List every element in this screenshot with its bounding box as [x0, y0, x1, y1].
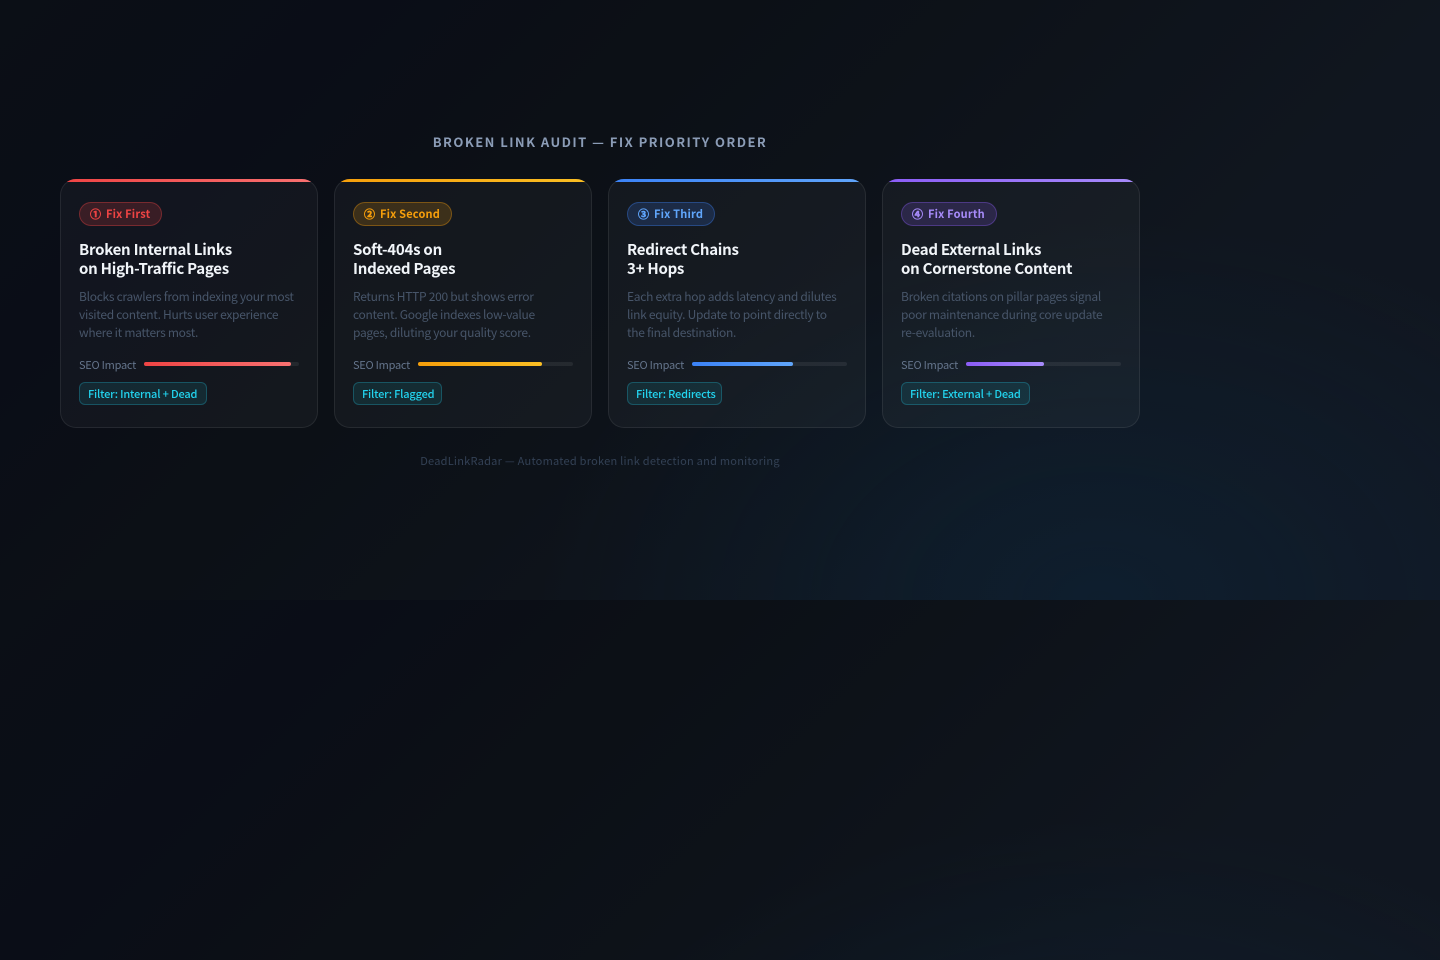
title: BROKEN LINK AUDIT — FIX PRIORITY ORDER [433, 132, 767, 151]
badge: fix second: ② [364, 206, 375, 222]
badge: fix third [627, 202, 715, 226]
card description: the final destination. [627, 324, 736, 341]
badge: fix first [79, 202, 162, 226]
footer note: DeadLinkRadar — Automated broken link detection and monitoring [420, 453, 780, 469]
badge: fix third: Fix Third [654, 206, 703, 222]
card description [353, 288, 535, 341]
badge: fix fourth: ④ [912, 206, 923, 222]
filter tag: Filter: Redirects [636, 386, 716, 402]
card heading: soft-404: Soft-404s on [353, 239, 442, 260]
card description: poor maintenance during core update [901, 306, 1102, 323]
card heading: broken internal links: Broken Internal Links [79, 239, 232, 260]
badge: fix second: Fix Second [380, 206, 440, 222]
card description: Each extra hop adds latency and dilutes [627, 288, 836, 305]
filter tag [627, 382, 722, 405]
card heading: dead external links [901, 239, 1072, 279]
card description: visited content. Hurts user experience [79, 306, 278, 323]
label: seo impact: SEO Impact [353, 357, 410, 373]
card description: link equity. Update to point directly to [627, 306, 827, 323]
card heading: soft-404 [353, 239, 456, 279]
impact bar: 95 percent [144, 362, 299, 366]
filter tag [901, 382, 1030, 405]
label: seo impact: SEO Impact [627, 357, 684, 373]
card heading: broken internal links: on High-Traffic Pages [79, 258, 229, 279]
card heading: redirect chains [627, 239, 739, 279]
impact bar: 80 percent [418, 362, 573, 366]
card description [79, 288, 294, 341]
panel: fix second [334, 179, 592, 428]
badge: fix fourth [901, 202, 997, 226]
card description [901, 288, 1102, 341]
card heading: redirect chains: 3+ Hops [627, 258, 684, 279]
card description: Broken citations on pillar pages signal [901, 288, 1101, 305]
card description: pages, diluting your quality score. [353, 324, 531, 341]
impact bar: 50 percent [966, 362, 1121, 366]
impact bar: 65 percent [692, 362, 847, 366]
panel: fix fourth [882, 179, 1140, 428]
filter tag: Filter: Flagged [362, 386, 434, 402]
card description [627, 288, 836, 341]
card heading: dead external links: Dead External Links [901, 239, 1041, 260]
card description: re-evaluation. [901, 324, 975, 341]
card description: content. Google indexes low-value [353, 306, 535, 323]
card heading: broken internal links [79, 239, 232, 279]
panel: fix first [60, 179, 318, 428]
card heading: redirect chains: Redirect Chains [627, 239, 739, 260]
card heading: dead external links: on Cornerstone Content [901, 258, 1072, 279]
filter tag [353, 382, 442, 405]
label: seo impact: SEO Impact [901, 357, 958, 373]
badge: fix first: ① [90, 206, 101, 222]
filter tag [79, 382, 207, 405]
badge: fix second [353, 202, 452, 226]
card description: where it matters most. [79, 324, 198, 341]
filter tag: Filter: Internal + Dead [88, 386, 197, 402]
panel: fix third [608, 179, 866, 428]
badge: fix third: ③ [638, 206, 649, 222]
filter tag: Filter: External + Dead [910, 386, 1021, 402]
card description: Blocks crawlers from indexing your most [79, 288, 294, 305]
badge: fix first: Fix First [106, 206, 150, 222]
card description: Returns HTTP 200 but shows error [353, 288, 534, 305]
badge: fix fourth: Fix Fourth [928, 206, 985, 222]
label: seo impact: SEO Impact [79, 357, 136, 373]
card heading: soft-404: Indexed Pages [353, 258, 455, 279]
